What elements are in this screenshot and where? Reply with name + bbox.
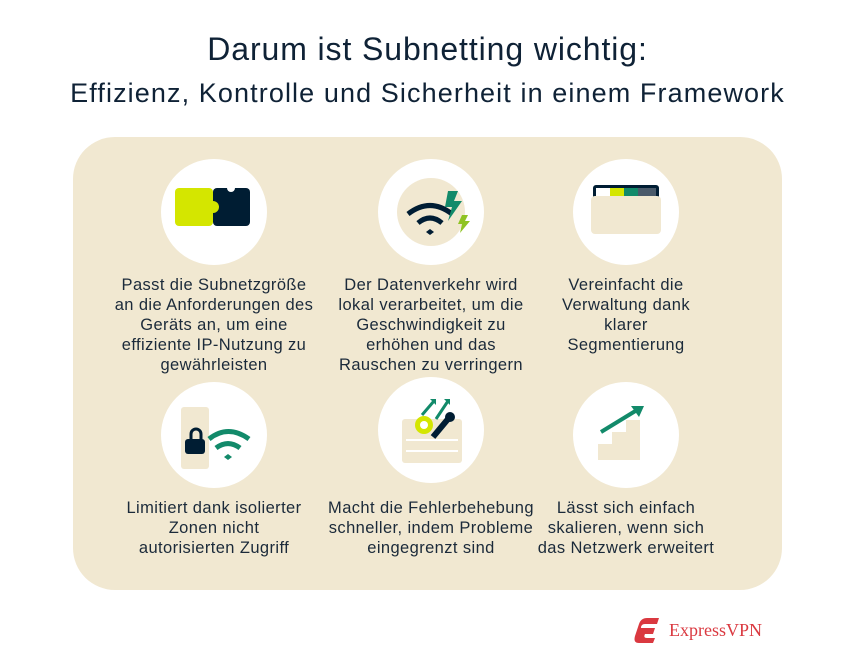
text 6: Lässt sich einfach	[557, 499, 695, 517]
text 2: Rauschen zu verringern	[339, 356, 523, 374]
text 3: Verwaltung dank	[562, 296, 690, 314]
text 1: an die Anforderungen des	[115, 296, 313, 314]
text 5: schneller, indem Probleme	[329, 519, 533, 537]
logo: ExpressVPN	[634, 618, 762, 643]
text 1: effiziente IP-Nutzung zu	[122, 336, 306, 354]
text 5: Macht die Fehlerbehebung	[328, 499, 534, 517]
icon: toolbox	[378, 377, 484, 483]
icon: wifi lightning	[378, 159, 484, 265]
text 3: klarer	[604, 316, 648, 334]
text 6	[538, 499, 714, 557]
text 2: erhöhen und das	[366, 336, 496, 354]
text 1	[115, 276, 313, 374]
text 4: Limitiert dank isolierter	[126, 499, 302, 517]
icon: lock wifi	[161, 382, 267, 488]
text 3: Segmentierung	[567, 336, 685, 354]
text 2: Der Datenverkehr wird	[344, 276, 518, 294]
panel: benefits	[73, 137, 782, 590]
text 1: gewährleisten	[160, 356, 268, 374]
text 6: das Netzwerk erweitert	[538, 539, 714, 557]
text 6: skalieren, wenn sich	[548, 519, 704, 537]
title: Darum ist Subnetting wichtig:	[207, 31, 648, 67]
text 5	[328, 499, 534, 557]
text 2	[338, 276, 524, 374]
subtitle: Effizienz, Kontrolle und Sicherheit in einem Framework	[70, 78, 785, 108]
icon: stairs arrow	[573, 382, 679, 488]
text 3: Vereinfacht die	[568, 276, 684, 294]
text 1: Passt die Subnetzgröße	[122, 276, 306, 294]
icon: folder segments	[573, 159, 679, 265]
text 1: Geräts an, um eine	[140, 316, 288, 334]
logo: ExpressVPN: ExpressVPN	[669, 620, 762, 640]
text 4: Zonen nicht	[169, 519, 259, 537]
text 4: autorisierten Zugriff	[139, 539, 289, 557]
text 2: Geschwindigkeit zu	[356, 316, 506, 334]
text 4	[126, 499, 302, 557]
icon: puzzle	[161, 159, 267, 265]
text 2: lokal verarbeitet, um die	[338, 296, 524, 314]
text 3	[562, 276, 690, 354]
text 5: eingegrenzt sind	[367, 539, 495, 557]
